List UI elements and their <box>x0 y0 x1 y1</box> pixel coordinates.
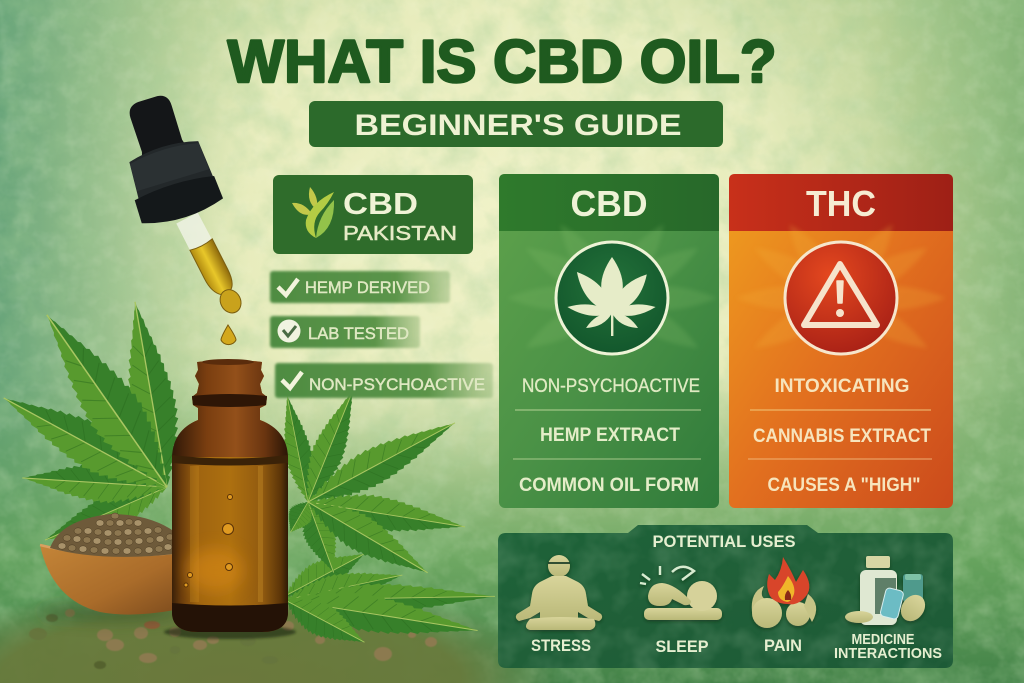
badge: non-psychoactive <box>275 363 493 398</box>
icon: cannabis leaf badge <box>556 242 668 354</box>
panel: CBD: NON-PSYCHOACTIVE <box>522 376 700 397</box>
cannabis leaf left <box>0 298 190 556</box>
title: WHAT IS CBD OIL? <box>228 28 776 95</box>
oil drop <box>221 325 236 345</box>
icon: logo leaf <box>292 187 334 238</box>
panel: THC: INTOXICATING <box>774 376 910 397</box>
panel: potential uses: STRESS <box>531 637 591 655</box>
logo: CBD Pakistan: PAKISTAN <box>343 223 457 245</box>
badge: hemp derived: HEMP DERIVED <box>305 278 430 297</box>
subtitle banner: BEGINNER'S GUIDE <box>354 109 682 142</box>
panel: CBD: HEMP EXTRACT <box>540 425 680 446</box>
panel: THC <box>729 174 953 508</box>
icon: check <box>278 279 298 295</box>
icon: check <box>282 372 302 388</box>
dropper cap <box>108 86 225 230</box>
icon: stress <box>516 555 602 630</box>
dropper <box>108 86 247 318</box>
icon: sleep <box>640 566 722 620</box>
subtitle banner <box>309 101 723 147</box>
ground with scattered seeds <box>0 575 560 683</box>
panel: potential uses <box>498 525 953 668</box>
panel: THC: CANNABIS EXTRACT <box>753 426 931 447</box>
logo: CBD Pakistan: CBD <box>343 186 418 221</box>
panel: potential uses: INTERACTIONS <box>834 645 942 662</box>
badge: lab tested <box>270 316 420 348</box>
badge: non-psychoactive: NON-PSYCHOACTIVE <box>309 375 485 394</box>
icon: circled check <box>278 320 300 342</box>
logo: CBD Pakistan <box>273 175 473 254</box>
dropper glass tube <box>176 212 247 318</box>
icon: warning badge <box>785 242 897 354</box>
panel: CBD: CBD <box>570 183 648 224</box>
panel: THC: THC <box>806 183 876 224</box>
cannabis leaves right <box>274 384 495 658</box>
panel: potential uses: PAIN <box>764 637 802 655</box>
panel: CBD <box>499 174 719 508</box>
amber dropper bottle <box>164 359 296 639</box>
icon: medicine interactions <box>845 556 930 626</box>
badge: lab tested: LAB TESTED <box>308 324 409 343</box>
wooden bowl of hemp seeds <box>38 513 182 620</box>
panel: potential uses: POTENTIAL USES <box>652 533 796 551</box>
panel: potential uses: MEDICINE <box>852 631 914 648</box>
icon: pain <box>752 557 816 628</box>
panel: THC: CAUSES A "HIGH" <box>768 475 920 496</box>
panel: potential uses: SLEEP <box>656 637 708 656</box>
panel: CBD: COMMON OIL FORM <box>519 475 699 496</box>
badge: hemp derived <box>270 271 450 303</box>
